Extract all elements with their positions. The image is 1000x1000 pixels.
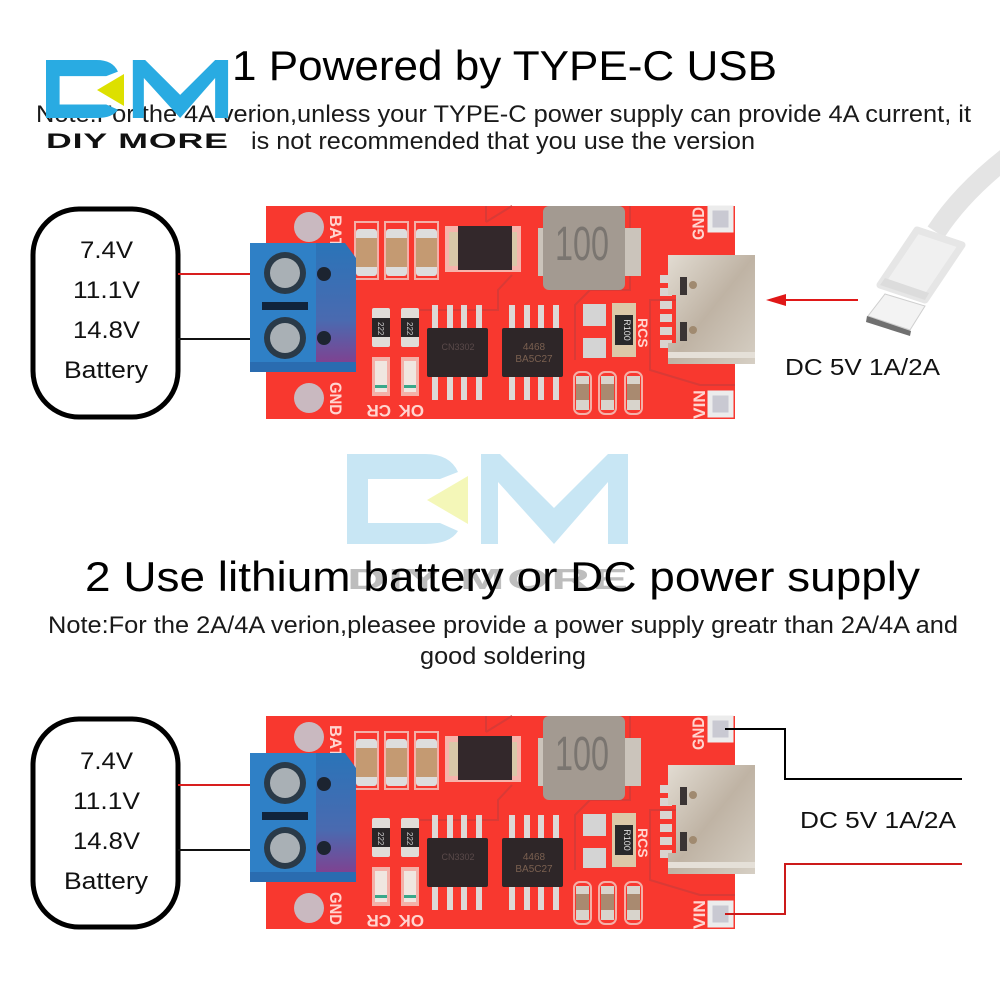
note: section 1 <box>36 101 971 155</box>
sense resistor <box>583 303 636 358</box>
diode <box>445 736 521 782</box>
note: section 2 <box>48 612 958 670</box>
silkscreen labels: GND <box>326 892 345 925</box>
chip 2 <box>502 305 563 400</box>
board 1 <box>250 206 755 420</box>
silkscreen labels: BAT <box>326 215 345 249</box>
chip 1 <box>427 815 488 910</box>
silkscreen labels: CR <box>366 401 391 420</box>
usb-c cable <box>866 155 1000 336</box>
wire: battery positive 1 <box>178 273 252 275</box>
silkscreen labels: OK <box>398 911 424 930</box>
resistors and LEDs <box>372 308 419 396</box>
resistors and LEDs <box>372 818 419 906</box>
silkscreen labels: GND <box>689 717 708 750</box>
battery box 2: 14.8V <box>73 828 140 855</box>
chip 2 <box>502 815 563 910</box>
chip 2: BA5C27 <box>515 864 553 875</box>
silkscreen labels: GND <box>689 207 708 240</box>
heading: section 2: 2 Use lithium battery or DC power supply <box>85 553 920 600</box>
silkscreen labels: BAT <box>326 725 345 759</box>
silkscreen labels: CR <box>366 911 391 930</box>
capacitors top <box>355 222 438 279</box>
arrow: usb direction <box>766 294 858 306</box>
battery box 2: 11.1V <box>73 788 140 815</box>
label: usb input: DC 5V 1A/2A <box>785 354 941 380</box>
wire: battery negative 1 <box>178 338 252 340</box>
wire: battery negative 2 <box>178 849 252 851</box>
battery box 2 <box>33 719 178 927</box>
battery box 2: 7.4V <box>80 748 133 775</box>
chip 1 <box>427 305 488 400</box>
usb-c socket <box>660 255 755 364</box>
chip 1: CN3302 <box>441 342 475 352</box>
logo: DIY MORE <box>46 60 228 153</box>
wire: DC positive <box>725 864 962 914</box>
battery box 1: 14.8V <box>73 317 140 344</box>
watermark logo: DIY MORE <box>347 563 628 596</box>
silkscreen labels: OK <box>398 401 424 420</box>
capacitors bottom <box>574 882 642 924</box>
board 2 <box>250 716 755 930</box>
resistors and LEDs: 222 <box>376 322 385 336</box>
wire: DC negative <box>725 729 962 779</box>
silkscreen labels: RCS <box>635 318 651 348</box>
chip 2: 4468 <box>523 342 546 353</box>
inductor: 100 <box>555 728 609 781</box>
pcb <box>266 716 735 929</box>
sense resistor <box>583 813 636 868</box>
silkscreen labels: VIN <box>690 900 709 929</box>
battery box 1: 11.1V <box>73 277 140 304</box>
battery box 1: Battery <box>64 357 148 384</box>
sense resistor: R100 <box>622 829 632 851</box>
watermark logo <box>347 454 628 596</box>
note: section 1: is not recommended that you use the version <box>251 128 755 155</box>
label: DC input: DC 5V 1A/2A <box>800 807 957 833</box>
silkscreen labels: GND <box>326 382 345 415</box>
chip 1: CN3302 <box>441 852 475 862</box>
silkscreen labels: VIN <box>690 390 709 419</box>
silkscreen labels <box>326 717 709 930</box>
note: section 2: good soldering <box>420 643 586 670</box>
note: section 2: Note:For the 2A/4A verion,pleasee provide a power supply greatr than 2A/4A and <box>48 612 958 639</box>
note: section 1: Note:For the 4A verion,unless your TYPE-C power supply can provide 4A current, it <box>36 101 971 128</box>
usb-c socket <box>660 765 755 874</box>
capacitors bottom <box>574 372 642 414</box>
resistors and LEDs: 222 <box>405 322 414 336</box>
resistors and LEDs: 222 <box>376 832 385 846</box>
logo: DIY MORE: DIY MORE <box>46 129 228 153</box>
inductor: 100 <box>555 218 609 271</box>
battery box 1 <box>33 209 178 417</box>
terminal block <box>250 753 356 882</box>
silkscreen labels <box>326 207 709 420</box>
terminal block <box>250 243 356 372</box>
chip 2: BA5C27 <box>515 354 553 365</box>
wire: battery positive 2 <box>178 784 252 786</box>
pcb <box>266 206 735 419</box>
capacitors top <box>355 732 438 789</box>
silkscreen labels: RCS <box>635 828 651 858</box>
chip 2: 4468 <box>523 852 546 863</box>
battery box 2: Battery <box>64 868 148 895</box>
battery box 1: 7.4V <box>80 237 133 264</box>
diode <box>445 226 521 272</box>
heading: section 1: 1 Powered by TYPE-C USB <box>232 42 777 89</box>
inductor <box>538 206 641 290</box>
sense resistor: R100 <box>622 319 632 341</box>
resistors and LEDs: 222 <box>405 832 414 846</box>
inductor <box>538 716 641 800</box>
